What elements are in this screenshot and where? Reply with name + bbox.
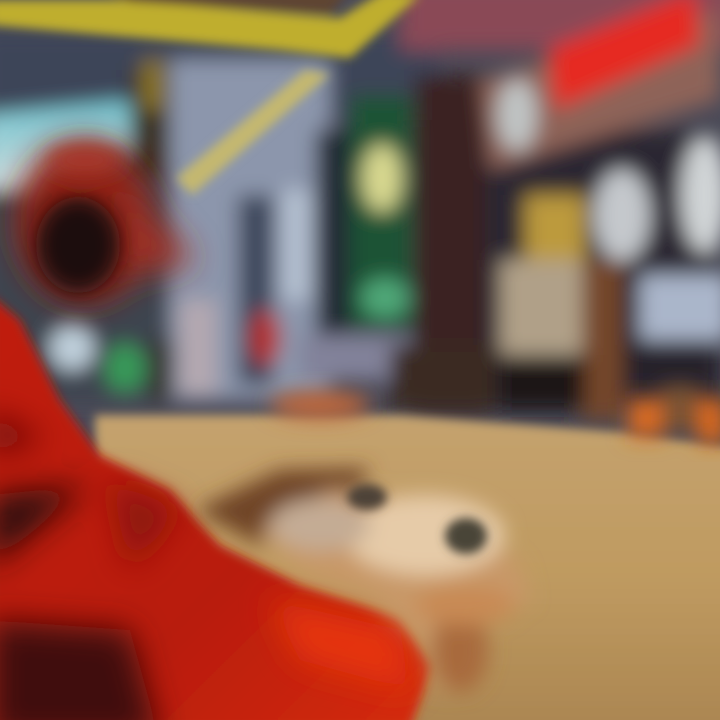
hat: red cap with dark front [15, 140, 195, 304]
red sweater body [0, 295, 432, 720]
hat: dark front [36, 146, 123, 293]
background: arcade scene [0, 0, 720, 420]
orange objects on floor edge [270, 385, 720, 444]
hands holding game controller [195, 468, 530, 695]
sweater folds and shadows [0, 410, 410, 720]
controller buttons [347, 484, 487, 554]
yellow ceiling beam [0, 0, 420, 195]
floor [95, 415, 720, 720]
